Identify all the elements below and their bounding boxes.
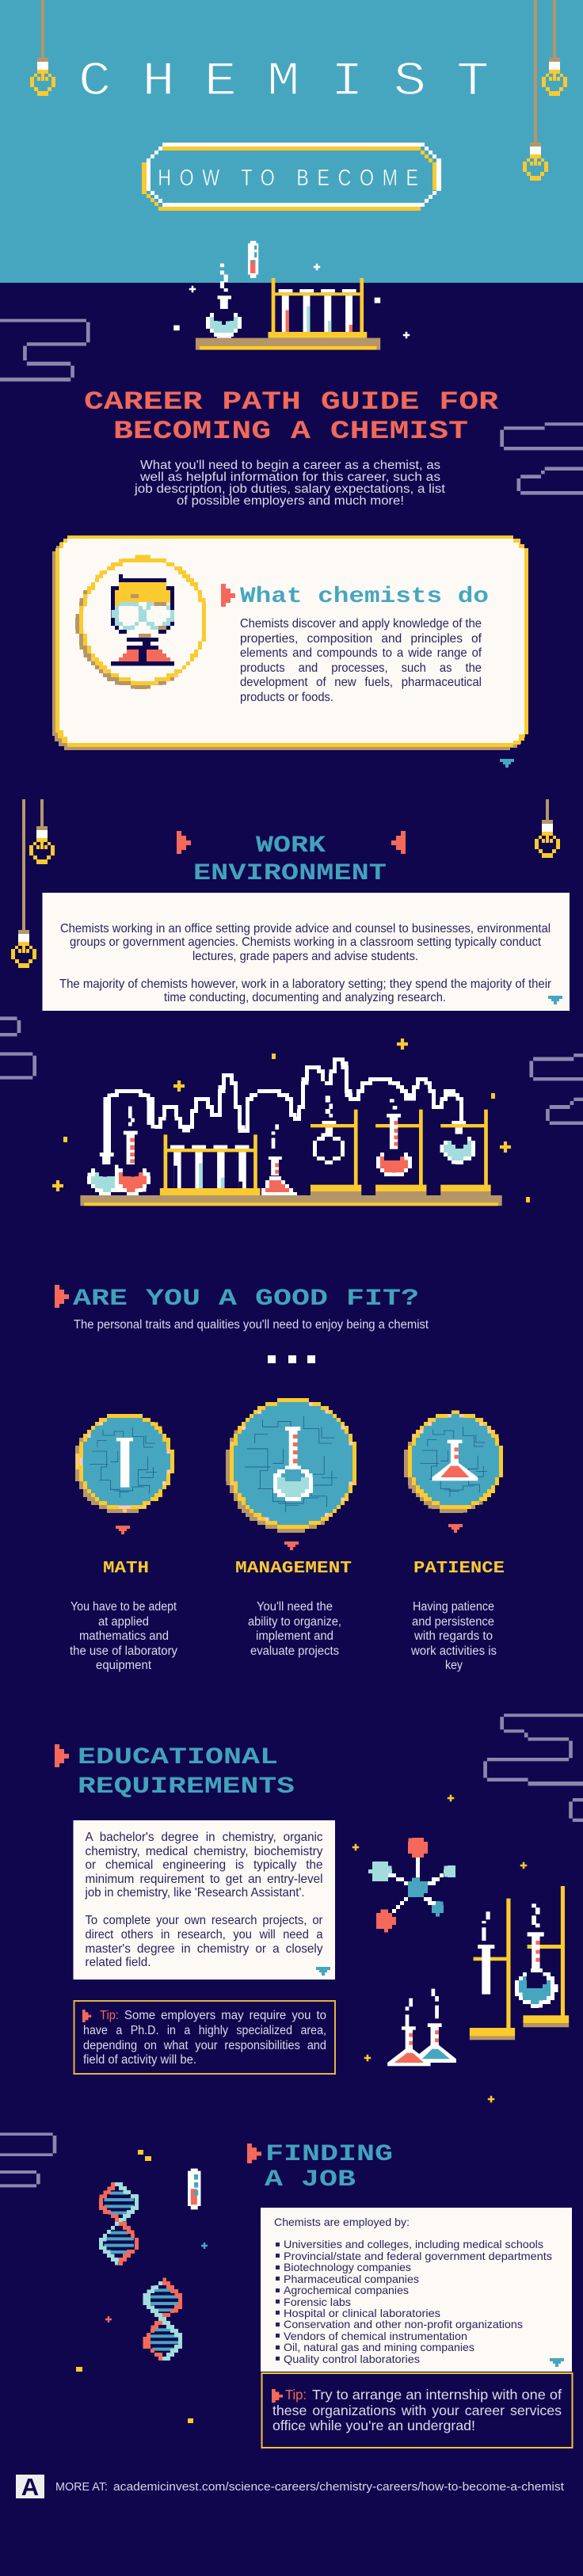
panel: work environment text: The majority of chemists however, work in a laboratory setting; they spend the majority of their	[59, 977, 552, 991]
trait: math: the use of laboratory	[70, 1644, 177, 1658]
description: elements and compounds to a wide range of	[240, 646, 482, 660]
trait: patience: Having patience	[413, 1600, 494, 1614]
panel: work environment text	[43, 893, 570, 1011]
tip box: education: Tip:	[100, 2009, 119, 2022]
panel: employers list: Quality control laboratories	[284, 2353, 420, 2365]
decorative pipes right	[500, 422, 583, 495]
panel: education text: master's degree in chemistry or a closely	[86, 1942, 323, 1956]
sparkles	[52, 1038, 530, 1202]
tip box: education	[74, 2001, 335, 2074]
panel: employers list: Universities and colleges, including medical schools	[284, 2238, 543, 2250]
heading: finding a job: A JOB	[265, 2166, 356, 2193]
description: development of new fuels, pharmaceutical	[240, 676, 482, 689]
trait: patience: PATIENCE	[413, 1560, 505, 1578]
pixel pill frame with subtitle	[142, 143, 441, 211]
heading: educational requirements: EDUCATIONAL	[78, 1744, 278, 1771]
molecule and glassware illustration	[352, 1795, 569, 2102]
panel: work environment text: lectures, grade papers and advise students.	[192, 950, 418, 963]
circuit texture and icons	[90, 1416, 487, 1512]
trait medallions	[74, 1398, 504, 1550]
panel: employers list: Vendors of chemical instrumentation	[284, 2330, 467, 2342]
trait: management: MANAGEMENT	[235, 1560, 352, 1578]
logo: A	[21, 2473, 39, 2501]
sparkles	[76, 2150, 208, 2423]
main heading	[84, 387, 499, 446]
icon: round flask	[285, 1427, 300, 1467]
tip box: education: have a Ph.D. in a highly specialized area,	[83, 2024, 326, 2037]
heading: work environment	[177, 831, 406, 887]
heading: work environment: ENVIRONMENT	[193, 860, 387, 887]
panel: education text: direct others in research, you will need a	[86, 1928, 323, 1942]
lab pieces	[173, 241, 380, 350]
trait: management: evaluate projects	[250, 1644, 339, 1658]
panel: work environment text: time conducting, documenting and analyzing research.	[164, 991, 446, 1004]
bench, racks and stands	[80, 1096, 502, 1206]
panel: employers list: Forensic labs	[284, 2296, 351, 2308]
tip box: finding a job: Tip:	[285, 2387, 307, 2403]
panel: employers list: Conservation and other non-profit organizations	[284, 2318, 523, 2330]
subtitle: HOW TO BECOME	[158, 164, 418, 191]
heading: What chemists do	[240, 585, 489, 609]
trait: math: at applied	[98, 1615, 149, 1629]
description	[240, 617, 482, 704]
tip box: education: depending on what your responsibilities and	[83, 2039, 326, 2052]
heading: educational requirements	[55, 1744, 295, 1801]
panel: education text: minimum requirement to get an entry-level	[86, 1873, 323, 1886]
medallion discs	[74, 1398, 504, 1532]
bullets	[276, 2243, 280, 2361]
icon: test tube	[116, 1438, 133, 1488]
icon: conical flask	[293, 1435, 478, 1480]
trait: math: You have to be adept	[70, 1600, 177, 1614]
trait: math	[70, 1560, 177, 1672]
description: properties, composition and principles of	[240, 632, 482, 646]
chemist avatar	[79, 558, 205, 686]
panel: work environment text: groups or government agencies. Chemists working in a classroom setting typically conduct	[70, 936, 542, 949]
panel: what chemists do	[52, 535, 528, 750]
top lab illustration	[173, 241, 410, 350]
trait: patience: with regards to	[413, 1629, 493, 1643]
hanging bulb left	[30, 0, 55, 96]
work environment bulbs	[11, 799, 560, 968]
panel: employers list: Oil, natural gas and mining companies	[284, 2341, 474, 2353]
panel: education text: To complete your own research projects, or	[86, 1914, 323, 1927]
panel: education text: chemistry, medical chemistry, biochemistry	[86, 1845, 323, 1858]
three dots	[268, 1355, 315, 1363]
description: products and processes, such as the	[240, 661, 482, 675]
main heading: BECOMING A CHEMIST	[113, 417, 468, 446]
footer	[16, 2473, 565, 2501]
tip box: education: Some employers may require you to	[124, 2009, 326, 2022]
heading: are you a good fit: ARE YOU A GOOD FIT?	[73, 1286, 419, 1313]
panel: work environment text: Chemists working in an office setting provide advice and counsel to businesses, environmental	[60, 922, 551, 936]
intro paragraph	[134, 459, 446, 508]
panel: employers list: Agrochemical companies	[284, 2284, 409, 2296]
panel: employers list: Biotechnology companies	[284, 2261, 411, 2273]
trait: patience: key	[445, 1659, 463, 1672]
tip box: education: field of activity will be.	[83, 2053, 196, 2067]
section arrow	[221, 584, 235, 607]
lab bench illustration	[52, 1038, 530, 1206]
heading: finding a job: FINDING	[265, 2141, 393, 2168]
small arrows	[116, 1524, 463, 1550]
intro paragraph: job description, job duties, salary expectations, a list	[134, 482, 446, 496]
footer: academicinvest.com/science-careers/chemistry-careers/how-to-become-a-chemist	[113, 2480, 565, 2494]
trait: math: equipment	[96, 1659, 152, 1672]
hanging bulb right short	[542, 0, 567, 96]
decorative pipes upper	[0, 319, 90, 382]
trait: management: implement and	[256, 1629, 333, 1643]
panel: employers list: Provincial/state and federal government departments	[284, 2250, 552, 2262]
heading: educational requirements: REQUIREMENTS	[78, 1774, 295, 1801]
description: Chemists discover and apply knowledge of the	[240, 617, 482, 631]
trait: math: MATH	[103, 1560, 149, 1578]
panel end marker	[500, 759, 514, 768]
trait: management	[235, 1560, 352, 1658]
trait: management: ability to organize,	[248, 1615, 341, 1629]
panel: education text: A bachelor's degree in chemistry, organic	[86, 1831, 323, 1844]
panel: employers list: Pharmaceutical companies	[284, 2273, 419, 2285]
stands and tubes	[387, 1886, 569, 2066]
flask bulb	[207, 307, 242, 337]
hanging bulb right long	[523, 0, 548, 181]
intro paragraph: What you'll need to begin a career as a chemist, as	[140, 459, 440, 472]
panel: education text	[73, 1820, 335, 1980]
trait: math: mathematics and	[79, 1629, 169, 1643]
thermometer	[248, 241, 258, 278]
decorative pipes mid	[0, 1016, 583, 1125]
panel: employers list: Hospital or clinical laboratories	[284, 2307, 440, 2319]
tip box: finding a job: these organizations with your career services	[272, 2403, 562, 2418]
trait: patience: work activities is	[410, 1644, 497, 1658]
sparkles	[189, 264, 410, 338]
trait: patience: and persistence	[412, 1615, 494, 1629]
title: CHEMIST	[78, 55, 490, 109]
heading: work environment: WORK	[256, 833, 326, 859]
panel: employers list	[261, 2208, 572, 2372]
sparkles	[352, 1795, 527, 2102]
dna illustration	[76, 2150, 208, 2423]
heading: finding a job	[247, 2141, 393, 2193]
dna rungs	[104, 2192, 178, 2351]
panel: employers list: Chemists are employed by:	[274, 2216, 410, 2228]
description: products or foods.	[240, 691, 333, 704]
panel: education text: job in chemistry, like 'Research Assistant'.	[85, 1886, 304, 1900]
trait: management: You'll need the	[257, 1600, 333, 1614]
dna strands	[102, 2183, 181, 2360]
tip box: finding a job: office while you're an undergrad!	[272, 2418, 475, 2433]
header band	[0, 0, 583, 283]
source link: MORE AT:	[55, 2480, 108, 2494]
tip box: finding a job: Try to arrange an internship with one of	[312, 2387, 562, 2403]
intro paragraph: of possible employers and much more!	[177, 494, 404, 508]
molecule and round flask	[370, 1837, 557, 2006]
intro paragraph: well as helpful information for this career, such as	[139, 471, 440, 484]
trait: patience	[410, 1560, 505, 1672]
panel: education text: or chemical engineering is typically the	[86, 1858, 323, 1872]
subheading: The personal traits and qualities you'll need to enjoy being a chemist	[74, 1318, 429, 1332]
glass tubing	[107, 1061, 461, 1153]
logo	[16, 2473, 44, 2501]
decorative pipes education	[483, 1713, 583, 1822]
decorative pipes finding a job	[0, 2132, 56, 2187]
flask bulbs	[89, 1131, 476, 1195]
thermometer	[188, 2169, 200, 2209]
tip box: finding a job	[261, 2373, 572, 2448]
main heading: CAREER PATH GUIDE FOR	[84, 387, 499, 417]
panel: education text: related field.	[86, 1956, 151, 1969]
